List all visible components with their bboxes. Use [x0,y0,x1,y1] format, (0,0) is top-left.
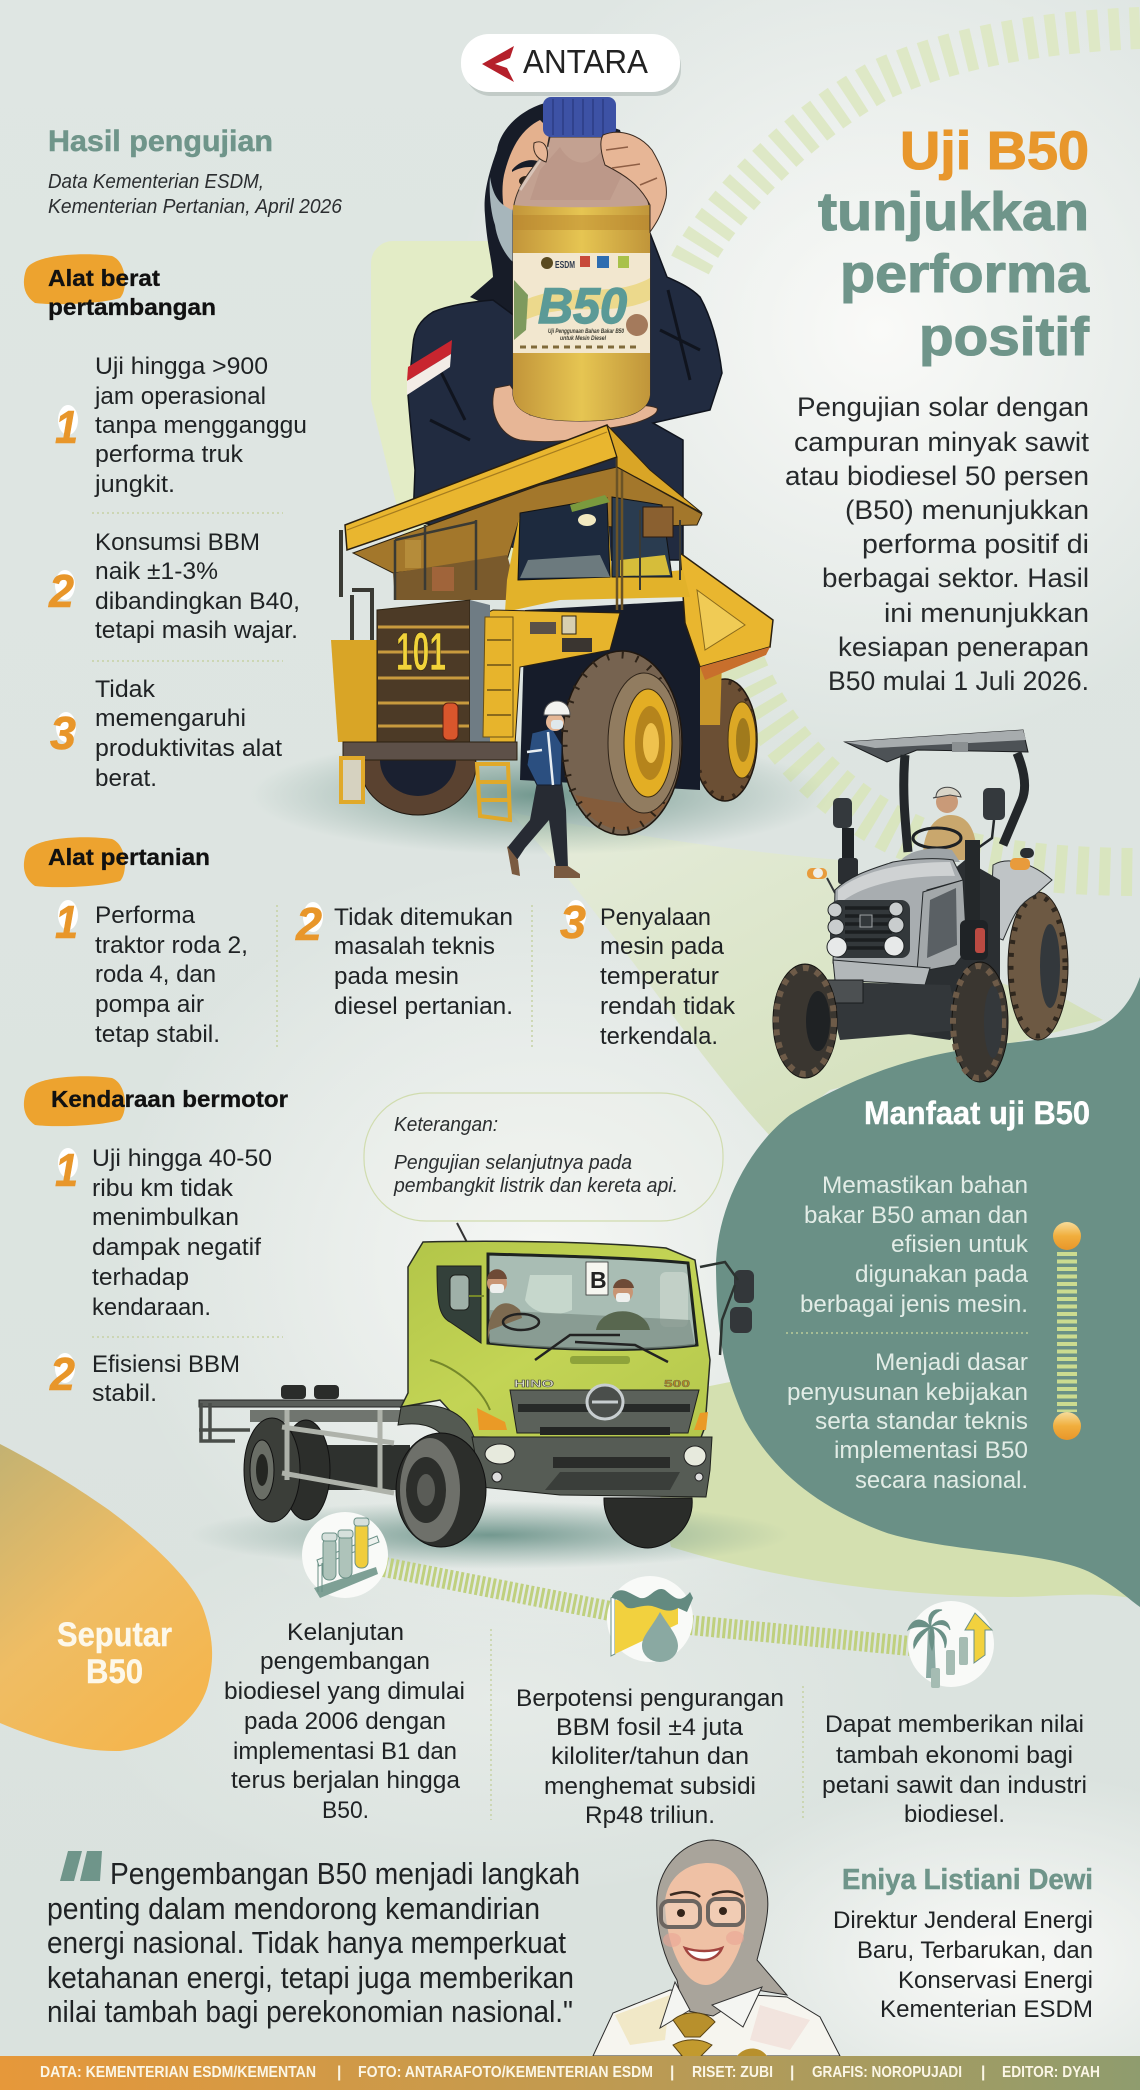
text: manfaat 2: secara nasional. [855,1467,1028,1494]
bottle label: B50: B50 [538,278,627,334]
quote: Pengembangan B50 menjadi langkah [110,1856,580,1891]
item 1: traktor roda 2, [95,932,248,959]
footer credits: EDITOR: DYAH [1002,2064,1100,2081]
canopy post and left rail [341,530,372,640]
connector strips between icons [384,1567,910,1646]
bumper [472,1437,712,1497]
text: seputar column 3: Dapat memberikan nilai [825,1711,1084,1738]
intro text: B50 mulai 1 Juli 2026. [828,666,1089,696]
body front [477,610,620,745]
B sign [586,1262,608,1295]
brand labels: HINO [514,1379,554,1390]
item 3: memengaruhi [95,705,246,732]
panel: seputar B50: B50 [86,1653,143,1691]
windshield [488,1254,697,1349]
item 2: pada mesin [334,963,459,990]
front wheel [562,651,682,835]
text: seputar column 1: pengembangan [260,1648,430,1675]
jacket [408,233,722,560]
driver and passenger [487,1269,650,1340]
text: seputar column 2 [516,1685,784,1829]
face [665,1863,746,1985]
item 3: Tidak [95,676,156,703]
rear wheel [693,679,757,801]
left wheel [360,715,476,815]
text: seputar column 1: B50. [322,1797,369,1824]
glasses [661,1901,700,1927]
wipers [535,1335,668,1362]
collar and gold necklace [660,1982,762,2028]
item 1: menimbulkan [92,1204,239,1231]
canopy underside [353,467,702,573]
intro text: (B50) menunjukkan [845,495,1089,525]
illustration: tractor [773,730,1068,1082]
title: positif [919,307,1090,367]
tractor roof [845,730,1028,762]
text: seputar column 1: Kelanjutan [287,1619,404,1646]
item 2: tetapi masih wajar. [95,617,298,644]
hood vent [570,1356,630,1364]
quote: ketahanan energi, tetapi juga memberikan [47,1960,574,1995]
door window and mirror [437,1266,481,1343]
blob and heading: Alat pertanian [48,844,210,870]
item 2: masalah teknis [334,933,495,960]
deck and machinery [393,555,520,600]
item 3: mesin pada [600,933,725,960]
name and job title: Eniya Listiani Dewi [842,1864,1093,1896]
intro text: berbagai sektor. Hasil [822,563,1089,593]
fender [990,861,1052,940]
icon: test tubes [302,1512,388,1598]
icon: fossil fuel drop [607,1576,693,1662]
icon: thermometer connector [1053,1222,1081,1440]
footer credits [0,2056,1140,2090]
text: manfaat 1: digunakan pada [855,1261,1029,1288]
intro text: Pengujian solar dengan [797,392,1089,422]
mirrors and exhaust [807,788,1005,893]
item 1 [55,353,307,498]
item 1: 1 [55,401,78,453]
text: seputar column 3: biodiesel. [904,1801,1005,1828]
text: manfaat 1: berbagai jenis mesin. [800,1291,1028,1318]
chassis [199,1385,410,1490]
item 1: jungkit. [94,471,175,498]
item 2: Tidak ditemukan [334,904,513,931]
text: seputar column 2: kiloliter/tahun dan [551,1743,749,1770]
text: manfaat 2: serta standar teknis [815,1408,1028,1435]
text: seputar column 2: menghemat subsidi [544,1773,756,1800]
lower hand [493,385,657,442]
blob and heading: pertambangan [48,294,216,320]
quote: energi nasional. Tidak hanya memperkuat [47,1925,566,1960]
footer credits: | [337,2064,341,2081]
cab [401,1241,710,1440]
item 1: terhadap [92,1264,189,1291]
cab [505,500,690,612]
footer credits: DATA: KEMENTERIAN ESDM/KEMENTAN [40,2064,316,2081]
item 1: Uji hingga >900 [95,353,268,380]
title: performa [840,244,1090,304]
item 1 [55,896,248,1048]
item 2 [49,1348,240,1407]
hood [900,848,960,862]
panel: seputar B50 [0,1444,212,1751]
bottle: untuk Mesin Diesel [560,335,606,342]
hijab [657,1840,787,2016]
item 1: dampak negatif [92,1234,261,1261]
text: manfaat 1: efisien untuk [891,1231,1029,1258]
worker [507,701,580,878]
item 2: Efisiensi BBM [92,1351,240,1378]
item 1: tanpa mengganggu [95,412,307,439]
flag patch [407,340,452,395]
callout: keterangan: Keterangan: [394,1114,498,1136]
text: seputar column 2: Berpotensi pengurangan [516,1685,784,1712]
B sign: B [590,1267,607,1293]
name and job title: Konservasi Energi [898,1967,1093,1994]
item 2: naik ±1-3% [95,558,218,585]
footer credits: | [670,2064,674,2081]
mirrors [700,1262,754,1355]
item 1: 1 [55,896,78,948]
dump side [680,553,773,667]
text: seputar column 3: petani sawit dan industri [822,1772,1087,1799]
bumper and steps [343,742,517,760]
heading: hasil pengujian: Kementerian Pertanian, April 2026 [48,196,343,218]
callout: keterangan [364,1093,723,1221]
blob and heading [24,254,216,320]
front wheels [396,1433,692,1548]
footer credits: FOTO: ANTARAFOTO/KEMENTERIAN ESDM [358,2064,653,2081]
item 3 [50,676,282,792]
intro text: kesiapan penerapan [838,632,1089,662]
item 1 [55,1144,272,1321]
footer credits: RISET: ZUBI [692,2064,773,2081]
intro text: ini menunjukkan [884,598,1089,628]
group: alat pertanian [24,837,736,1050]
item 2: 2 [295,898,322,950]
item 3: 3 [50,707,76,759]
yellow struts [678,660,722,725]
bumper and chassis [833,960,930,985]
text: manfaat 2 [787,1349,1028,1494]
intro text: campuran minyak sawit [794,427,1090,457]
quote [47,1851,580,2029]
bottle [513,97,650,421]
blob and heading [24,1076,288,1126]
item 2 [295,898,513,1020]
rear wheels [244,1410,394,1522]
name and job title [833,1864,1093,2023]
item 2: 2 [49,1348,75,1400]
quote: penting dalam mendorong kemandirian [47,1891,540,1926]
item 3: berat. [95,765,157,792]
icon: quote mark [60,1851,102,1881]
logo: ANTARA [461,34,681,96]
item 3: Penyalaan [600,904,711,931]
hijab [470,103,650,320]
portrait: Eniya Listiani Dewi [593,1840,840,2057]
text: manfaat 1: Memastikan bahan [822,1172,1028,1199]
item 3: rendah tidak [600,993,736,1020]
item 3: terkendala. [600,1023,718,1050]
group: alat berat pertambangan [24,254,307,792]
item 1: performa truk [95,441,244,468]
quote: nilai tambah bagi perekonomian nasional." [47,1994,573,2029]
item 3: 3 [560,896,586,948]
footer credits: | [981,2064,985,2081]
item 2: dibandingkan B40, [95,588,300,615]
bottle: ESDM [555,260,575,271]
item 1: 1 [55,1144,78,1196]
item 2: Konsumsi BBM [95,529,260,556]
intro text [785,392,1090,696]
front wheels [773,962,1008,1082]
item 2: stabil. [92,1380,157,1407]
panel: manfaat uji B50 [716,977,1140,1607]
body centre dark [880,860,1000,1040]
illustration: woman holding B50 bottle [407,97,722,560]
blob and heading: Alat berat [48,265,160,291]
grille [510,1390,699,1433]
name and job title: Baru, Terbarukan, dan [857,1937,1093,1964]
item 2: 2 [48,565,74,617]
heading: hasil pengujian: Hasil pengujian [48,125,273,158]
item 1: ribu km tidak [92,1175,234,1202]
text: seputar column 3: tambah ekonomi bagi [836,1742,1073,1769]
item 3: produktivitas alat [95,735,282,762]
title: Uji B50 [900,121,1089,181]
decorative green shapes and striped arc [371,28,1140,1137]
smile [685,1948,722,1960]
heading: hasil pengujian [48,125,343,218]
bottle: Uji Penggunaan Bahan Bakar B50 [548,328,624,335]
panel: seputar B50: Seputar [57,1616,172,1654]
text: seputar column 1: biodiesel yang dimulai [224,1678,465,1705]
title: tunjukkan [818,182,1089,242]
icon: palm, coins and arrow [908,1601,994,1688]
face and mask [502,120,550,215]
driver [913,787,977,860]
item 1: jam operasional [94,383,266,410]
footer credits: GRAFIS: NOROPUJADI [812,2064,962,2081]
footer credits: | [790,2064,794,2081]
text: manfaat 1: bakar B50 aman dan [804,1202,1028,1229]
light green blob under benefit panel [640,1300,1140,1600]
item 1: tetap stabil. [95,1021,220,1048]
shirt [593,1990,840,2056]
canopy face [345,425,617,550]
text: seputar column 1: pada 2006 dengan [244,1708,446,1735]
illustration: yellow dump truck [250,425,830,878]
name and job title: Direktur Jenderal Energi [833,1907,1093,1934]
illustration: green truck: 500 [664,1379,691,1390]
illustration: green truck [190,1223,790,1569]
text: seputar column 2: Rp48 triliun. [585,1802,715,1829]
callout: keterangan: Pengujian selanjutnya pada [394,1152,632,1174]
rear wheel [1008,892,1068,1040]
item 1: Uji hingga 40-50 [92,1145,272,1172]
text: seputar column 1: implementasi B1 dan [233,1738,457,1765]
item 3: temperatur [600,963,719,990]
grille with number [377,600,490,742]
text: seputar column 1 [224,1619,465,1824]
upper hand [601,132,666,232]
title [818,121,1090,367]
grille and headlights [827,900,910,958]
dark underside [520,600,700,790]
intro text: atau biodiesel 50 persen [785,461,1089,491]
callout: keterangan: pembangkit listrik dan kereta api. [393,1175,678,1197]
intro text: performa positif di [862,529,1089,559]
item 3 [560,896,736,1050]
grille with number: 101 [396,622,446,682]
logo: ANTARA: ANTARA [523,43,648,80]
blob and heading [24,837,210,887]
blob and heading: Kendaraan bermotor [51,1086,288,1112]
name and job title: Kementerian ESDM [880,1996,1093,2023]
text: seputar column 1: terus berjalan hingga [231,1767,461,1794]
item 2: diesel pertanian. [334,993,513,1020]
text: manfaat 1 [800,1172,1029,1318]
item 1: roda 4, dan [95,961,216,988]
text: seputar column 2: BBM fosil ±4 juta [556,1714,744,1741]
item 1: pompa air [95,991,204,1018]
exhaust post and red lamp [965,840,980,925]
heading: manfaat uji B50: Manfaat uji B50 [864,1095,1090,1131]
group: kendaraan bermotor [24,1076,288,1407]
text: manfaat 2: penyusunan kebijakan [787,1379,1028,1406]
text: manfaat 2: implementasi B50 [834,1437,1028,1464]
roof posts [904,753,1025,852]
text: manfaat 2: Menjadi dasar [875,1349,1028,1376]
item 1: kendaraan. [92,1294,211,1321]
text: seputar column 3 [822,1711,1087,1828]
item 2 [48,529,300,644]
item 1: Performa [95,902,196,929]
heading: hasil pengujian: Data Kementerian ESDM, [48,171,264,193]
